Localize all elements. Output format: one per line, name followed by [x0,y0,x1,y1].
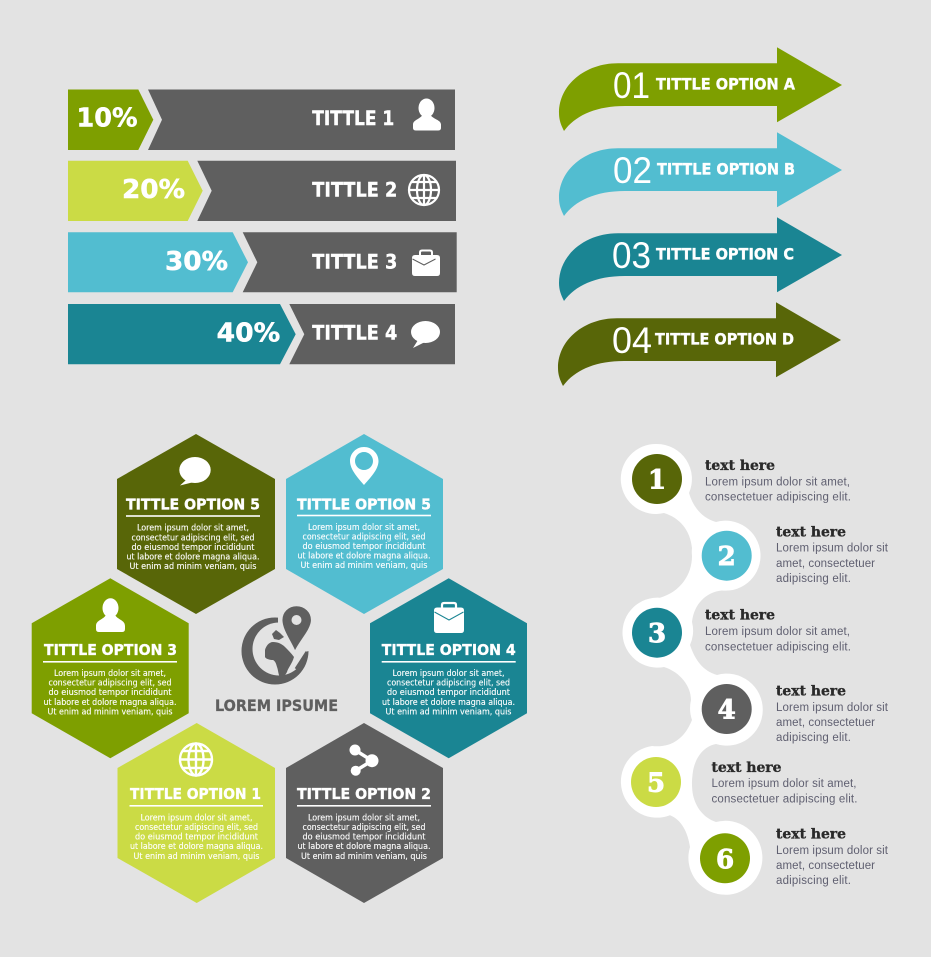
africa [265,642,294,678]
bar: 40% title 4: TITTLE 4 [312,321,397,344]
step 1: 1 [648,466,666,496]
icon: globe [180,744,212,776]
arrow: 01 option A: 01 [613,65,650,106]
hexagon: dark olive option 5: TITTLE OPTION 5 [126,496,260,514]
step 4: amet, consectetuer [776,717,875,729]
text block [44,669,176,717]
bar: 10% title 1: 10% [76,104,138,134]
text block: ut labore et dolore magna aliqua. [298,552,430,562]
icon: share nodes [350,744,378,776]
arrow: 03 option C [559,217,842,301]
arrow: 01 option A [559,47,842,131]
step 6 [700,826,889,887]
step 2: Lorem ipsum dolor sit [776,543,889,555]
text block: ut labore et dolore magna aliqua. [130,842,263,852]
step 1: Lorem ipsum dolor sit amet, [705,476,850,488]
text block: Lorem ipsum dolor sit amet, [308,814,420,824]
hexagon: teal option 4 [370,578,527,758]
bar: 30% title 3: TITTLE 3 [312,250,397,273]
text block: Ut enim ad minim veniam, quis [300,561,428,571]
text block: Lorem ipsum dolor sit amet, [54,669,166,679]
step 4: 4 [718,696,736,726]
text block: ut labore et dolore magna aliqua. [44,698,176,708]
text block [382,669,515,717]
text block [298,814,430,862]
arrow: 03 option C: 03 [612,235,651,276]
step 1: text here [705,458,775,474]
text block: Ut enim ad minim veniam, quis [386,707,512,717]
text block: Lorem ipsum dolor sit amet, [137,524,249,534]
timeline connector shape [621,444,763,895]
text block: ut labore et dolore magna aliqua. [382,698,515,708]
bar: 40% title 4 [68,304,455,364]
text block: consectetur adipiscing elit, sed [387,679,510,689]
bar: 30% title 3: 30% [165,247,228,277]
step 6: text here [776,826,846,842]
text block: Ut enim ad minim veniam, quis [48,707,173,717]
hexagon: lime option 1 [118,723,275,903]
bar: 10% title 1 [68,90,455,150]
text block [126,524,260,572]
step 4 [702,684,889,744]
panel: hexagon diagram [32,434,527,903]
icon: briefcase [434,603,464,633]
text block: do eiusmod tempor incididunt [387,688,511,698]
bar: 20% title 2: 20% [122,175,185,205]
bar: 30% title 3 [68,232,457,292]
text block [298,523,430,571]
arrow: 04 option D [558,302,841,386]
text block: Ut enim ad minim veniam, quis [301,852,427,862]
step 4: adipiscing elit. [776,732,851,744]
panel: numbered timeline [621,444,889,895]
step 5: 5 [647,768,665,798]
step 1 [632,454,851,504]
center label: LOREM IPSUME [215,696,338,715]
step 5: text here [712,760,782,776]
text block: consectetur adipiscing elit, sed [132,533,254,543]
text block: do eiusmod tempor incididunt [135,833,259,843]
text block: consectetur adipiscing elit, sed [302,823,426,833]
icon: speech bubble [411,321,440,348]
step 6: Lorem ipsum dolor sit [776,845,889,857]
bar: 20% title 2 [68,161,456,221]
hexagon: blue option 5: TITTLE OPTION 5 [297,496,431,514]
step 4: Lorem ipsum dolor sit [776,702,889,714]
text block: do eiusmod tempor incididunt [132,543,255,553]
text block: consectetur adipiscing elit, sed [135,823,258,833]
hexagon: teal option 4: TITTLE OPTION 4 [382,641,516,659]
text block: Ut enim ad minim veniam, quis [134,852,260,862]
step 6: 6 [716,845,734,875]
map pin [282,606,312,652]
panel: numbered arrows [558,47,842,386]
step 2 [702,524,889,585]
text block [130,814,263,862]
text block: Lorem ipsum dolor sit amet, [140,814,252,824]
arrow: 01 option A: TITTLE OPTION A [656,74,796,94]
panel: percentage bars [68,90,457,364]
bar: 20% title 2: TITTLE 2 [312,179,397,202]
text block: Lorem ipsum dolor sit amet, [308,523,420,533]
step 3: 3 [648,619,666,649]
icon: globe with location pin [242,606,318,684]
step 5 [631,757,858,807]
icon: person [413,98,441,130]
bar: 40% title 4: 40% [217,319,280,349]
text block: do eiusmod tempor incididunt [302,542,426,552]
hexagon: green option 3 [32,578,189,758]
icon: map pin [350,447,378,485]
text block: do eiusmod tempor incididunt [302,833,426,843]
step 3: Lorem ipsum dolor sit amet, [705,626,850,638]
step 5: Lorem ipsum dolor sit amet, [712,778,856,790]
europe [272,630,284,640]
step 1: consectetuer adipiscing elit. [705,492,851,504]
hexagon: lime option 1: TITTLE OPTION 1 [130,785,261,803]
arrow: 02 option B [559,132,842,216]
step 3: consectetuer adipiscing elit. [705,641,851,653]
arrow: 02 option B: TITTLE OPTION B [657,160,795,178]
text block: ut labore et dolore magna aliqua. [298,842,430,852]
arrow: 02 option B: 02 [613,150,652,191]
icon: globe [409,175,439,205]
step 2: text here [776,524,846,540]
icon: speech bubble [179,457,211,486]
step 5: consectetuer adipiscing elit. [712,793,858,805]
arrow: 03 option C: TITTLE OPTION C [656,244,794,264]
step 2: 2 [718,542,736,572]
text block: ut labore et dolore magna aliqua. [126,553,260,563]
step 3: text here [705,608,775,624]
step 2: amet, consectetuer [776,558,875,570]
hexagon: dark olive option 5 [117,434,275,614]
text block: Ut enim ad minim veniam, quis [130,562,257,572]
icon: briefcase [412,250,440,276]
step 6: amet, consectetuer [776,860,875,872]
text block: consectetur adipiscing elit, sed [302,532,426,542]
hexagon: blue option 5 [286,434,443,614]
step 2: adipiscing elit. [776,573,851,585]
text block: Lorem ipsum dolor sit amet, [392,669,504,679]
arrow: 04 option D: 04 [612,320,652,361]
step 6: adipiscing elit. [776,875,851,887]
bar: 10% title 1: TITTLE 1 [312,107,394,130]
step 3 [632,608,851,658]
hexagon: green option 3: TITTLE OPTION 3 [44,641,177,659]
hexagon: gray option 2: TITTLE OPTION 2 [297,785,431,803]
step 4: text here [776,684,846,700]
icon: person [96,598,125,632]
text block: do eiusmod tempor incididunt [48,688,172,698]
text block: consectetur adipiscing elit, sed [48,679,172,689]
arrow: 04 option D: TITTLE OPTION D [655,330,794,348]
hexagon: gray option 2 [286,723,443,903]
